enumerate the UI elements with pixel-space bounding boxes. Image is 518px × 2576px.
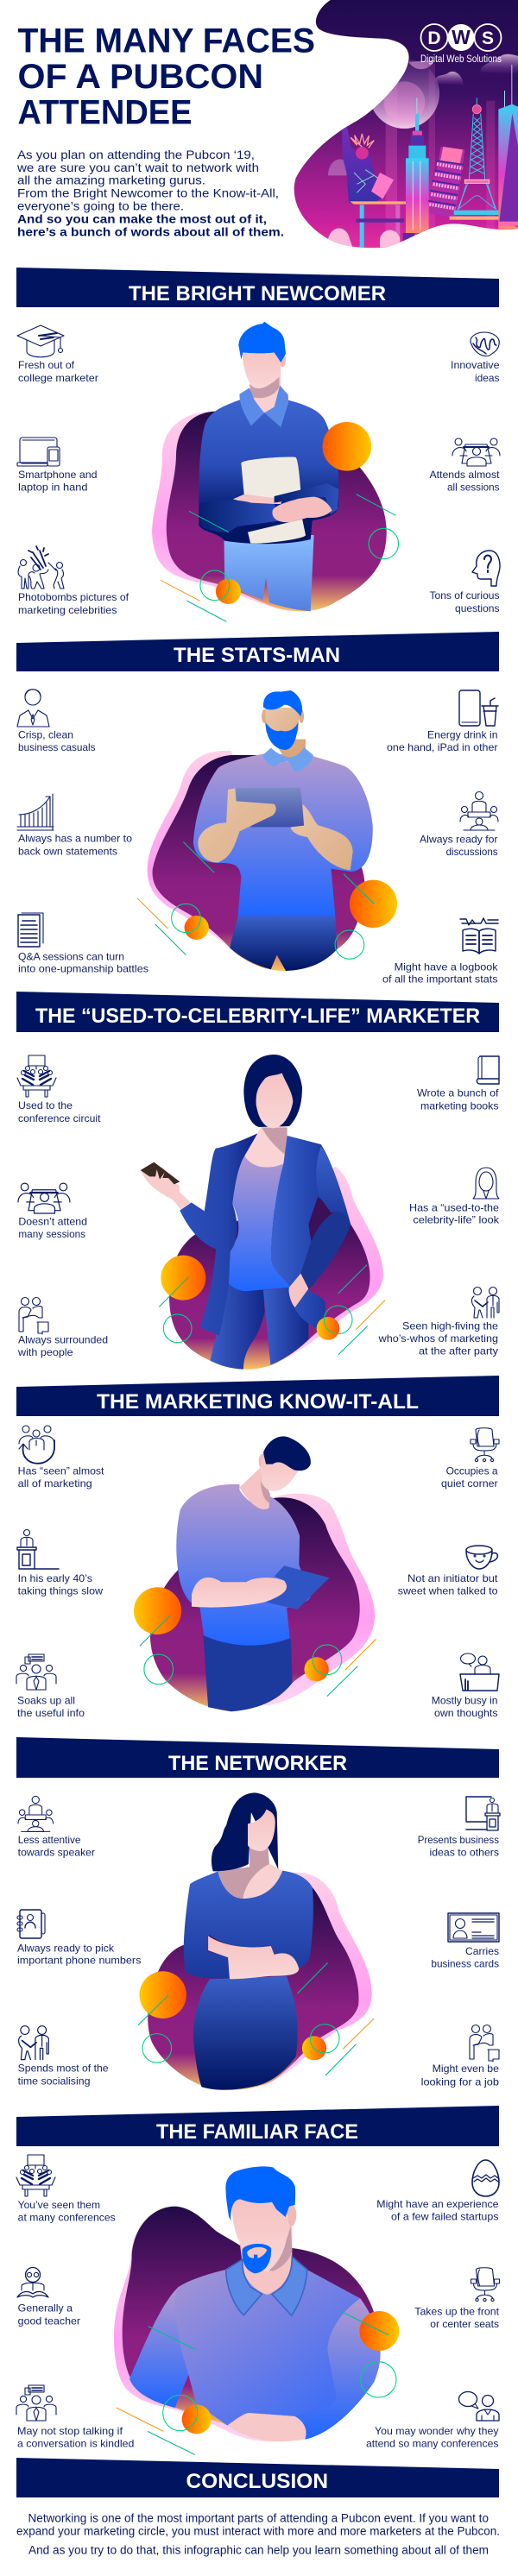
label: Q and A: into one-upmanship battles bbox=[18, 963, 148, 975]
label: looking for a job: looking for a job bbox=[421, 2076, 499, 2088]
icon: handshake job bbox=[470, 2025, 499, 2062]
label: doesn't attend: Doesn’t attend bbox=[18, 1215, 87, 1227]
logo: DWS: W bbox=[452, 26, 471, 48]
label: smartphone and laptop: laptop in hand bbox=[18, 482, 88, 494]
icon: laptop and phone bbox=[17, 438, 60, 466]
section: the marketing know-it-all bbox=[16, 1376, 499, 1719]
heading band: THE STATS-MAN bbox=[174, 644, 340, 667]
label: soaks useful info bbox=[17, 1694, 85, 1719]
label: always has a number bbox=[18, 833, 132, 857]
icon: phone and cup bbox=[459, 690, 498, 726]
label: own thoughts: Mostly busy in bbox=[432, 1694, 497, 1706]
conclusion text: And as you try to do that, this infographic can help you learn something about all of them bbox=[28, 2543, 489, 2556]
icon: meeting speaker bbox=[18, 1796, 53, 1831]
intro text bbox=[16, 148, 284, 238]
label: may not stop talking bbox=[17, 2425, 134, 2450]
intro text: we are sure you can’t wait to network with bbox=[16, 161, 259, 174]
logo: DWS bbox=[420, 24, 502, 65]
label: occupies quiet corner bbox=[441, 1464, 498, 1490]
header illustration: city skyline blob bbox=[285, 0, 518, 259]
heading band: THE “USED-TO-CELEBRITY-LIFE” MARKETER bbox=[35, 1005, 480, 1028]
label: doesn't attend: many sessions bbox=[18, 1228, 85, 1240]
label: marketing books bbox=[417, 1087, 499, 1112]
heading band: THE FAMILIAR FACE bbox=[156, 2120, 358, 2144]
title: THE MANY FACES bbox=[17, 22, 315, 60]
label: phone numbers: Always ready to pick bbox=[17, 1942, 115, 1954]
character: networker bbox=[138, 1792, 374, 2090]
label: failed startups: Might have an experience bbox=[376, 2198, 499, 2210]
label: less attentive: towards speaker bbox=[18, 1847, 95, 1859]
label: soaks useful info: the useful info bbox=[17, 1707, 85, 1719]
heading band bbox=[16, 2106, 499, 2146]
label: good teacher: good teacher bbox=[18, 2315, 80, 2327]
label: Q and A bbox=[18, 950, 148, 975]
title bbox=[17, 22, 315, 131]
label: socialising bbox=[18, 2063, 109, 2087]
icon: photobomb bbox=[18, 546, 64, 589]
label: attends sessions: all sessions bbox=[447, 482, 499, 494]
label: carries business cards bbox=[431, 1945, 499, 1969]
label: occupies quiet corner: Occupies a bbox=[446, 1464, 498, 1477]
icon: graduation cap bbox=[17, 325, 64, 357]
section: the used-to-celebrity-life marketer bbox=[16, 992, 500, 1370]
intro text: all the amazing marketing gurus. bbox=[17, 174, 205, 186]
label: phone numbers bbox=[17, 1942, 141, 1967]
icon: meeting bbox=[452, 438, 500, 466]
label: many conferences: You’ve seen them bbox=[18, 2199, 100, 2211]
label: socialising: Spends most of the bbox=[18, 2063, 109, 2075]
heading band bbox=[16, 992, 499, 1032]
conclusion text: expand your marketing circle, you must interact with more and more marketers at the Pubcon. bbox=[16, 2524, 500, 2537]
label: Q and A: Q&A sessions can turn bbox=[18, 950, 124, 962]
label: ready for discussions: Always ready for bbox=[420, 834, 497, 846]
label: socialising: time socialising bbox=[18, 2075, 91, 2087]
icon: logbook bbox=[460, 918, 498, 954]
icon: handshake bbox=[19, 1298, 48, 1334]
label: wonder why: attend so many conferences bbox=[366, 2438, 499, 2450]
icon: discussion bbox=[460, 792, 498, 830]
conclusion text: Networking is one of the most important parts of attending a Pubcon event. If you want to bbox=[28, 2512, 489, 2525]
label: fresh out of college: college marketer bbox=[18, 372, 98, 384]
icon: two people talking bbox=[19, 2026, 48, 2060]
icon: book bbox=[477, 1056, 499, 1084]
label: smartphone and laptop bbox=[18, 469, 98, 494]
heading band bbox=[16, 2458, 499, 2497]
label: doesn't attend bbox=[18, 1215, 87, 1240]
label: photobombs bbox=[18, 591, 130, 616]
label: ready for discussions: discussions bbox=[446, 846, 498, 858]
character: know-it-all bbox=[134, 1436, 376, 1711]
label: early 40s: In his early 40’s bbox=[18, 1572, 92, 1584]
label: marketing books: Wrote a bunch of bbox=[417, 1087, 499, 1099]
icon: cracked egg bbox=[472, 2160, 499, 2196]
icon: business suit bbox=[17, 690, 49, 727]
label: photobombs: marketing celebrities bbox=[18, 604, 117, 616]
label: always has a number: Always has a number to bbox=[18, 833, 132, 845]
character: familiar face bbox=[114, 2166, 399, 2454]
label: used-to-the celebrity-life bbox=[409, 1201, 500, 1225]
icon: documents bbox=[18, 913, 43, 947]
label: high-fiving: Seen high-fiving the bbox=[402, 1319, 498, 1332]
leaning tower of pisa bbox=[428, 147, 464, 218]
icon: office chair bbox=[471, 1428, 499, 1462]
label: logbook bbox=[382, 960, 499, 986]
label: curious questions: questions bbox=[455, 602, 499, 614]
icon: speech bubble person bbox=[459, 2392, 499, 2421]
label: curious questions: Tons of curious bbox=[430, 589, 499, 601]
label: business casuals bbox=[18, 729, 95, 753]
logo: DWS: D bbox=[427, 28, 441, 48]
section: the networker bbox=[16, 1737, 500, 2090]
icon: person at desk bbox=[460, 1653, 499, 1691]
label: not an initiator: Not an initiator but bbox=[407, 1572, 498, 1584]
label: fresh out of college bbox=[18, 359, 98, 384]
label: used-to-the celebrity-life: Has a “used-to-the bbox=[409, 1201, 499, 1213]
heading band: THE NETWORKER bbox=[168, 1752, 347, 1775]
label: energy drink: Energy drink in bbox=[427, 729, 497, 741]
label: looking for a job bbox=[421, 2063, 499, 2088]
character: newcomer bbox=[152, 322, 399, 621]
intro text: everyone’s going to be there. bbox=[17, 200, 184, 212]
section: the familiar face bbox=[16, 2106, 500, 2454]
icon: growth chart bbox=[17, 794, 54, 830]
icon: people in circle bbox=[19, 1426, 54, 1464]
label: presents business ideas: Presents business bbox=[418, 1834, 499, 1846]
label: own thoughts bbox=[432, 1694, 497, 1719]
label: occupies quiet corner: quiet corner bbox=[441, 1477, 498, 1490]
icon: woman portrait bbox=[473, 1168, 499, 1199]
icon: conference bbox=[16, 2155, 55, 2196]
label: conference circuit: conference circuit bbox=[18, 1112, 101, 1124]
label: always has a number: back own statements bbox=[18, 845, 117, 857]
label: front or center seats bbox=[414, 2305, 500, 2330]
torii gate and statue of liberty bbox=[342, 126, 406, 248]
label: energy drink: one hand, iPad in other bbox=[387, 741, 497, 753]
heading band: CONCLUSION bbox=[186, 2470, 328, 2493]
intro text: From the Bright Newcomer to the Know-it-All, bbox=[17, 186, 279, 200]
eiffel tower bbox=[450, 98, 502, 220]
label: may not stop talking: a conversation is kindled bbox=[17, 2438, 134, 2450]
character: celebrity marketer bbox=[141, 1055, 385, 1370]
label: used-to-the celebrity-life: celebrity-life” look bbox=[413, 1213, 500, 1225]
label: not an initiator bbox=[398, 1572, 498, 1597]
label: conference circuit bbox=[18, 1099, 101, 1124]
label: phone numbers: important phone numbers bbox=[17, 1955, 141, 1967]
label: innovative ideas: Innovative bbox=[451, 359, 500, 371]
label: high-fiving: who’s-whos of marketing bbox=[378, 1332, 498, 1345]
intro text: And so you can make the most out of it, bbox=[17, 213, 267, 226]
icon: business card bbox=[448, 1913, 499, 1942]
label: own thoughts: own thoughts bbox=[434, 1707, 497, 1719]
icon: address book bbox=[17, 1910, 45, 1938]
character: stats-man bbox=[137, 690, 397, 971]
label: marketing books: marketing books bbox=[420, 1100, 499, 1112]
section: the bright newcomer bbox=[16, 268, 500, 621]
icon: people group bbox=[16, 1654, 56, 1690]
heading band bbox=[16, 1376, 499, 1416]
label: attends sessions: Attends almost bbox=[430, 469, 500, 481]
label: high-fiving: at the after party bbox=[419, 1345, 498, 1357]
label: curious questions bbox=[430, 589, 499, 614]
label: surrounded with people bbox=[17, 1334, 108, 1358]
label: seen almost all: all of marketing bbox=[18, 1477, 92, 1490]
label: front or center seats: or center seats bbox=[430, 2318, 499, 2330]
label: many conferences bbox=[18, 2199, 116, 2224]
heading band: THE MARKETING KNOW-IT-ALL bbox=[97, 1390, 419, 1414]
label: seen almost all: Has “seen” almost bbox=[18, 1464, 104, 1477]
label: photobombs: Photobombs pictures of bbox=[18, 591, 130, 603]
label: wonder why bbox=[366, 2425, 499, 2450]
label: may not stop talking: May not stop talking if bbox=[17, 2425, 123, 2437]
label: many conferences: at many conferences bbox=[18, 2212, 116, 2224]
label: innovative ideas: ideas bbox=[475, 372, 499, 384]
icon: head with question mark bbox=[472, 551, 500, 586]
empire state building bbox=[406, 98, 429, 233]
label: smartphone and laptop: Smartphone and bbox=[18, 469, 98, 481]
label: business casuals: business casuals bbox=[18, 741, 95, 753]
icon: podium bbox=[17, 1529, 59, 1569]
label: presents business ideas: ideas to others bbox=[430, 1847, 499, 1859]
label: innovative ideas bbox=[451, 359, 500, 384]
icon: conference table bbox=[17, 1055, 56, 1097]
logo: DWS: S bbox=[482, 28, 494, 48]
label: logbook: Might have a logbook bbox=[395, 960, 499, 973]
label: good teacher bbox=[18, 2302, 80, 2327]
title: ATTENDEE bbox=[17, 93, 192, 131]
logo: DWS: Digital Web Solutions bbox=[420, 54, 502, 65]
icon: teacher bbox=[17, 2268, 48, 2297]
label: logbook: of all the important stats bbox=[382, 973, 497, 986]
heading band bbox=[16, 632, 499, 671]
conclusion text bbox=[16, 2512, 500, 2556]
label: high-fiving bbox=[378, 1319, 498, 1357]
icon: talking group bbox=[16, 2385, 56, 2421]
label: failed startups bbox=[376, 2198, 499, 2222]
label: wonder why: You may wonder why they bbox=[375, 2425, 499, 2437]
section: conclusion bbox=[16, 2458, 500, 2556]
label: early 40s: taking things slow bbox=[18, 1585, 103, 1597]
intro text: As you plan on attending the Pubcon ‘19, bbox=[17, 148, 255, 161]
icon: sessions meeting bbox=[18, 1183, 70, 1213]
label: good teacher: Generally a bbox=[18, 2302, 73, 2315]
label: less attentive: Less attentive bbox=[18, 1834, 81, 1846]
section: the stats-man bbox=[16, 632, 499, 986]
label: not an initiator: sweet when talked to bbox=[398, 1585, 498, 1597]
icon: presentation bbox=[466, 1797, 500, 1830]
label: fresh out of college: Fresh out of bbox=[18, 359, 75, 371]
label: ready for discussions bbox=[420, 834, 498, 858]
intro text: here’s a bunch of words about all of them. bbox=[17, 226, 284, 238]
icon: smiling cup bbox=[466, 1546, 497, 1569]
label: early 40s bbox=[18, 1572, 103, 1597]
heading band: THE BRIGHT NEWCOMER bbox=[129, 282, 386, 305]
icon: two people bbox=[471, 1288, 499, 1318]
label: carries business cards: Carries bbox=[465, 1945, 499, 1957]
label: presents business ideas bbox=[418, 1834, 499, 1859]
title: OF A PUBCON bbox=[17, 58, 263, 96]
label: less attentive bbox=[18, 1834, 95, 1859]
label: conference circuit: Used to the bbox=[18, 1099, 73, 1112]
label: business casuals: Crisp, clean bbox=[18, 729, 73, 741]
label: carries business cards: business cards bbox=[431, 1957, 499, 1969]
label: front or center seats: Takes up the front bbox=[414, 2305, 500, 2317]
label: soaks useful info: Soaks up all bbox=[17, 1694, 75, 1706]
label: looking for a job: Might even be bbox=[433, 2063, 499, 2075]
label: surrounded with people: with people bbox=[17, 1346, 73, 1358]
icon: front chair bbox=[471, 2268, 499, 2302]
label: surrounded with people: Always surrounded bbox=[18, 1334, 108, 1346]
one world trade center tower bbox=[498, 65, 518, 231]
heading band bbox=[16, 268, 499, 307]
label: seen almost all bbox=[18, 1464, 104, 1490]
heading band bbox=[16, 1737, 499, 1778]
label: failed startups: of a few failed startups bbox=[391, 2210, 499, 2222]
label: energy drink bbox=[387, 729, 497, 753]
icon: brain bbox=[471, 332, 499, 356]
label: attends sessions bbox=[430, 469, 500, 494]
